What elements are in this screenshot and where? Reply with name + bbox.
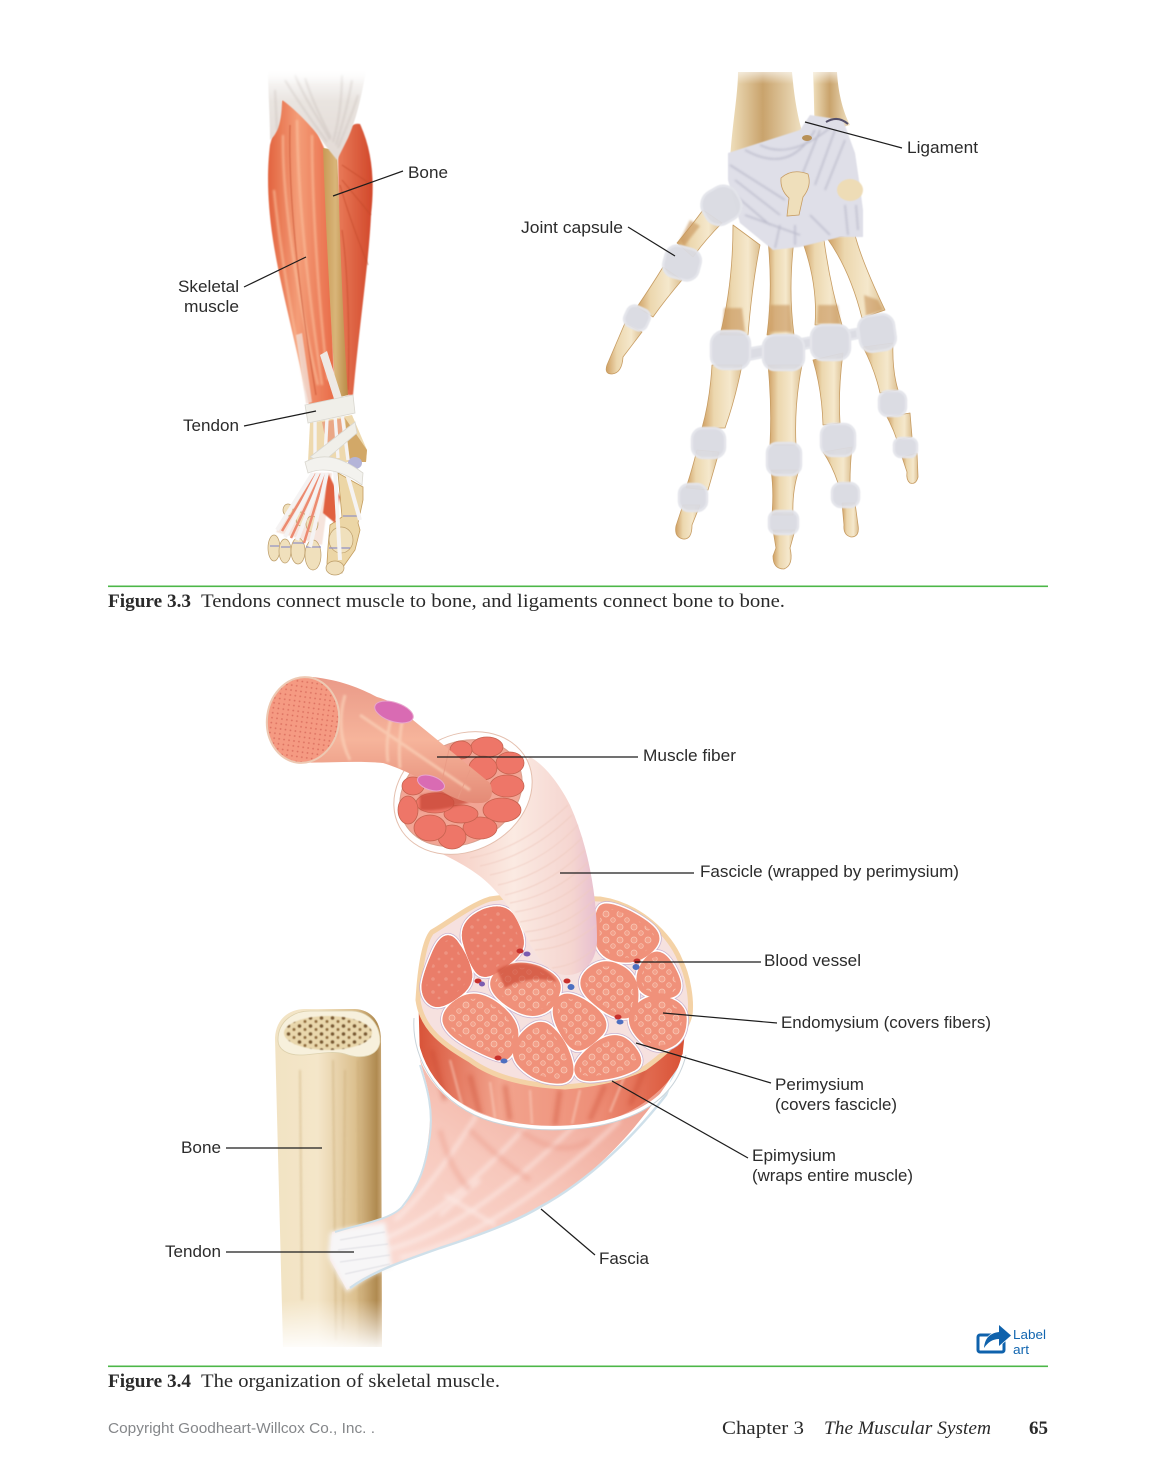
label: Tendon (figure 3.4): Tendon [165,1243,221,1261]
cross-section disc [418,896,691,1087]
label: Endomysium [663,1013,991,1032]
finger and hand bones [606,210,918,569]
fiber cut end with myofibrils [261,672,345,768]
fascia white ring [415,1018,684,1128]
bone shading [680,220,883,332]
label: Skeletal muscle: muscle [184,298,239,316]
label: Perimysium [636,1043,897,1114]
caption: figure 3.3: Tendons connect muscle to bone, and ligaments connect bone to bone. [201,591,785,612]
footer: chapter and page number: The Muscular System [824,1418,991,1439]
panel: figure 3.4 muscle fiber [261,672,492,803]
label: Muscle fiber: Muscle fiber [643,747,737,765]
panel: figure 3.4 fascicle [372,708,597,975]
foot bones and tendons [268,414,367,575]
label: Perimysium: Perimysium [775,1076,864,1094]
fascicle cross-sections [424,906,684,1081]
label: Joint capsule [521,219,675,256]
label: Joint capsule: Joint capsule [521,219,623,237]
nuclei [372,697,416,727]
label: Epimysium: (wraps entire muscle) [752,1167,913,1185]
panel: figure 3.4 long bone [275,1009,387,1352]
label: Skeletal muscle [178,257,306,316]
muscle side wall [418,985,690,1128]
icon: label art link: art [1013,1342,1029,1357]
label: Epimysium: Epimysium [752,1147,836,1165]
panel: figure 3.3 lower leg illustration [260,66,375,575]
label: Bone (figure 3.4): Bone [181,1139,221,1157]
label: Endomysium: Endomysium (covers fibers) [781,1014,991,1032]
forearm bones [730,64,850,175]
label: Epimysium [612,1081,913,1185]
footer: chapter and page number: 65 [1029,1418,1048,1439]
label: Ligament [805,122,978,157]
fascicle cut end [372,708,554,878]
icon: label art link: Label [1013,1327,1046,1342]
label: Bone: Bone [408,164,448,182]
tendon straps [305,395,363,485]
label: Bone [333,164,448,196]
label: Blood vessel: Blood vessel [764,952,861,970]
wrist ligaments [728,115,863,250]
footer: copyright: Copyright Goodheart-Willcox Co., Inc. . [108,1421,375,1437]
caption: figure 3.3: Figure 3.3 [108,591,191,612]
caption: figure 3.4: Figure 3.4 [108,1371,191,1392]
label: Skeletal muscle: Skeletal [178,278,239,296]
label: Fascia [541,1209,650,1268]
label: Tendon: Tendon [183,417,239,435]
joint capsules [621,180,917,534]
panel: figure 3.4 fascia cone and tendon [328,1060,682,1292]
caption: figure 3.4: The organization of skeletal muscle. [201,1371,500,1392]
panel: figure 3.4 muscle belly with epimysium [414,896,691,1130]
label: Tendon [183,411,316,435]
leg muscles and bone [260,66,375,405]
label: Ligament: Ligament [907,139,978,157]
blood vessels [474,948,640,1064]
icon: label art link [978,1325,1046,1357]
footer: chapter and page number: Chapter 3 [722,1418,804,1439]
label: Fascia: Fascia [599,1250,650,1268]
label: Perimysium: (covers fascicle) [775,1096,897,1114]
panel: figure 3.3 hand skeleton illustration [606,64,918,569]
label: Fascicle: Fascicle (wrapped by perimysium) [700,863,959,881]
